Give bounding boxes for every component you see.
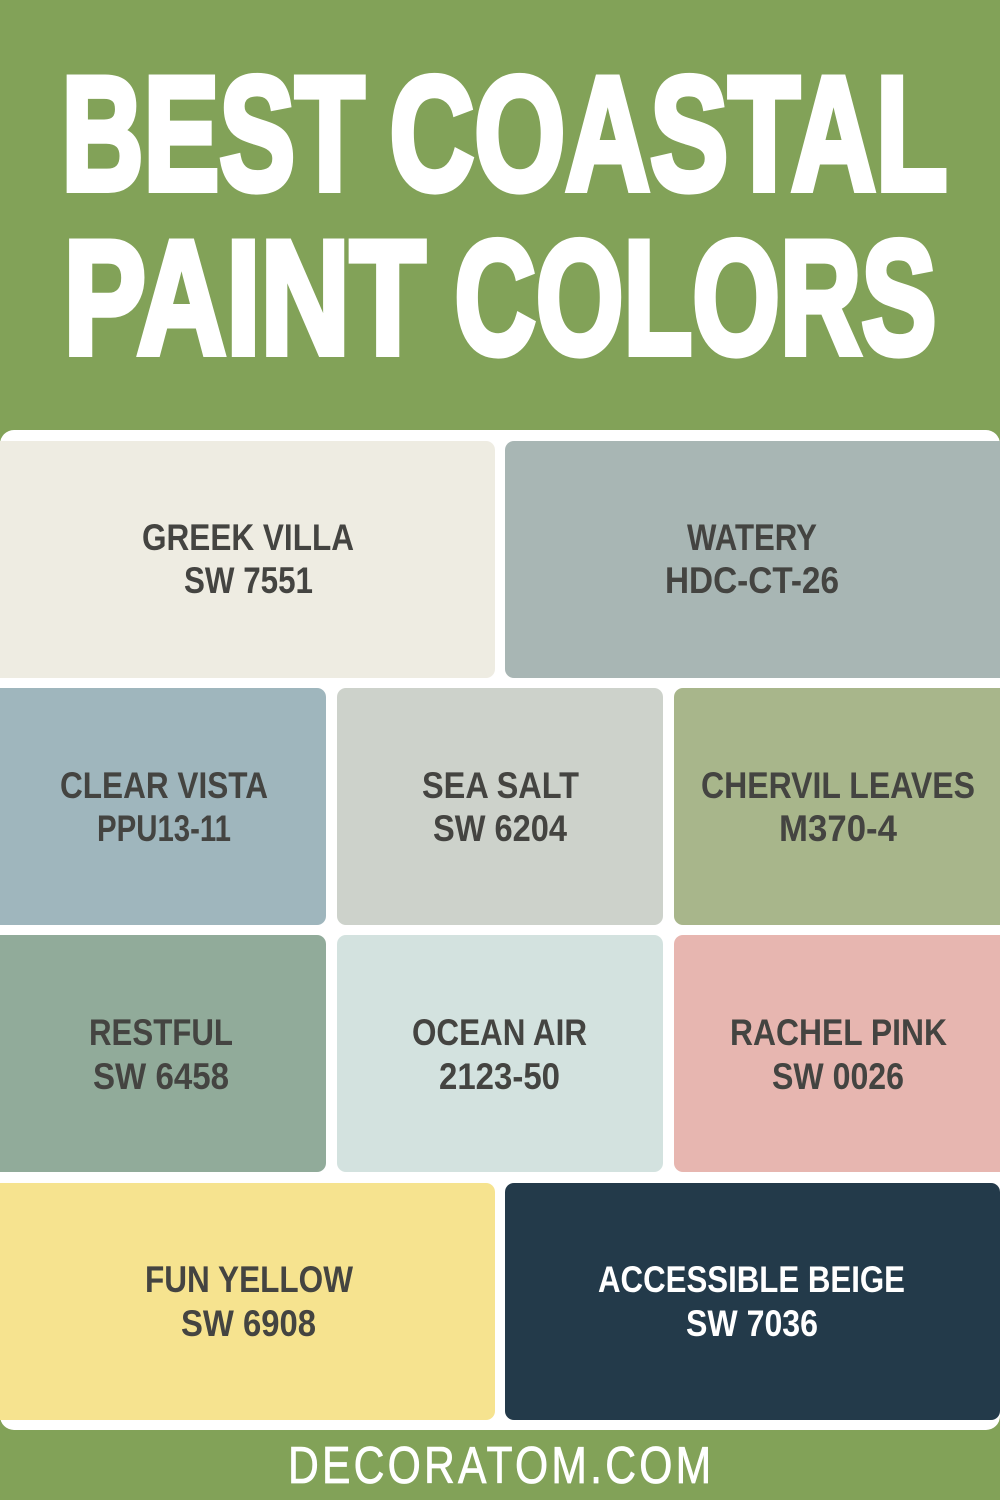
swatch: Watery [505, 441, 1000, 678]
swatch: Accessible Beige: ACCESSIBLE BEIGE [598, 1259, 905, 1300]
title [62, 44, 948, 388]
swatch: Greek Villa: SW 7551 [184, 560, 313, 601]
swatch: Restful [0, 935, 326, 1172]
swatch: Rachel Pink: SW 0026 [772, 1056, 904, 1097]
swatch: Ocean Air: OCEAN AIR [412, 1012, 587, 1053]
swatch: Fun Yellow: SW 6908 [181, 1303, 316, 1344]
swatch: Greek Villa [0, 441, 495, 678]
swatch: Chervil Leaves: M370-4 [779, 808, 897, 849]
swatch: Sea Salt: SEA SALT [422, 765, 579, 806]
swatch: Restful: RESTFUL [89, 1012, 233, 1053]
swatch: Clear Vista: CLEAR VISTA [60, 765, 268, 806]
swatch: Sea Salt: SW 6204 [433, 808, 567, 849]
swatch: Watery: WATERY [687, 517, 817, 558]
swatch: Sea Salt [337, 688, 663, 925]
swatch: Chervil Leaves [674, 688, 1000, 925]
swatch: Rachel Pink: RACHEL PINK [730, 1012, 947, 1053]
swatch: Accessible Beige: SW 7036 [686, 1303, 818, 1344]
swatch: Restful: SW 6458 [93, 1056, 229, 1097]
swatch: Fun Yellow [0, 1183, 495, 1420]
swatch: Clear Vista [0, 688, 326, 925]
swatch: Ocean Air [337, 935, 663, 1172]
swatch: Greek Villa: GREEK VILLA [142, 517, 354, 558]
footer: website: DECORATOM.COM [288, 1437, 711, 1495]
title: PAINT [64, 208, 426, 388]
swatch: Rachel Pink [674, 935, 1000, 1172]
swatch: Ocean Air: 2123-50 [439, 1056, 560, 1097]
swatch: Watery: HDC-CT-26 [665, 560, 839, 601]
title: BEST [62, 44, 364, 224]
swatch: Accessible Beige [505, 1183, 1000, 1420]
swatch: Clear Vista: PPU13-11 [97, 808, 231, 849]
swatch: Fun Yellow: FUN YELLOW [145, 1259, 353, 1300]
panel: white swatch board [0, 430, 1000, 1430]
